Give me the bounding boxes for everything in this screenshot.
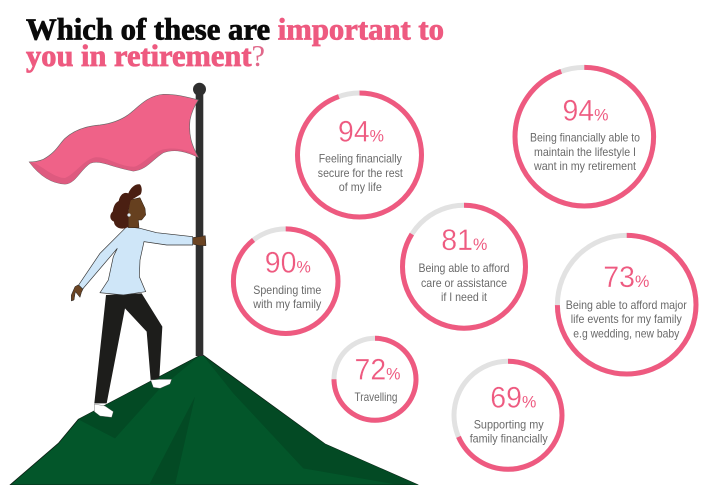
stat: 90% family time: with my family [252, 297, 321, 311]
stat: 94% financially secure: of my life [339, 180, 382, 194]
stat: 69% supporting family: Supporting my [474, 418, 544, 432]
stat: 90% family time: 90% [265, 246, 311, 280]
stat: 90% family time: Spending time [253, 283, 322, 297]
person face [128, 198, 146, 228]
stat: 94% financially secure: Feeling financially [319, 152, 402, 166]
stat: 69% supporting family: family financially [470, 432, 548, 446]
illustration: pink flag [29, 94, 198, 184]
stat: 72% travelling [334, 338, 416, 420]
person earring [127, 213, 131, 217]
illustration: mountain [10, 355, 418, 485]
person hair [110, 184, 142, 229]
title [26, 12, 444, 73]
stat: 81% care: care or assistance [421, 276, 507, 290]
stat: 94% maintain lifestyle [515, 67, 654, 206]
person lower foot [94, 404, 113, 417]
title: you in retirement? [26, 38, 265, 73]
stat: 81% care: Being able to afford [418, 261, 510, 275]
person left hand [71, 285, 83, 301]
stat: 72% travelling: 72% [354, 354, 400, 386]
stat: 94% maintain lifestyle: 94% [562, 94, 608, 128]
stat: 94% maintain lifestyle: Being financially able to [530, 130, 640, 144]
stat: 94% financially secure: secure for the rest [318, 166, 403, 180]
stat: 73% life events: Being able to afford major [566, 298, 687, 312]
stat: 81% care [402, 205, 526, 328]
person upper foot [151, 379, 172, 388]
stat: 94% financially secure: 94% [338, 116, 384, 149]
person shirt [79, 227, 193, 295]
stat: 73% life events [557, 235, 696, 374]
person right hand [192, 236, 206, 246]
stat: 81% care: if I need it [441, 290, 488, 304]
stat: 73% life events: e.g wedding, new baby [573, 326, 679, 340]
illustration: flag pole [193, 83, 206, 356]
person trousers [94, 293, 162, 403]
stat: 94% maintain lifestyle: want in my retirement [533, 159, 637, 173]
stat: 94% maintain lifestyle: maintain the lifestyle I [534, 145, 636, 159]
illustration: person [71, 184, 206, 417]
stat: 90% family time [233, 229, 338, 334]
stat: 69% supporting family [454, 361, 562, 469]
title: Which of these are important to [26, 12, 444, 46]
stat: 81% care: 81% [441, 224, 487, 257]
stat: 72% travelling: Travelling [354, 390, 398, 404]
stat: 69% supporting family: 69% [490, 382, 536, 414]
stat: 73% life events: 73% [603, 261, 649, 294]
stat: 73% life events: life events for my family [571, 312, 682, 326]
stat: 94% financially secure [298, 93, 422, 217]
